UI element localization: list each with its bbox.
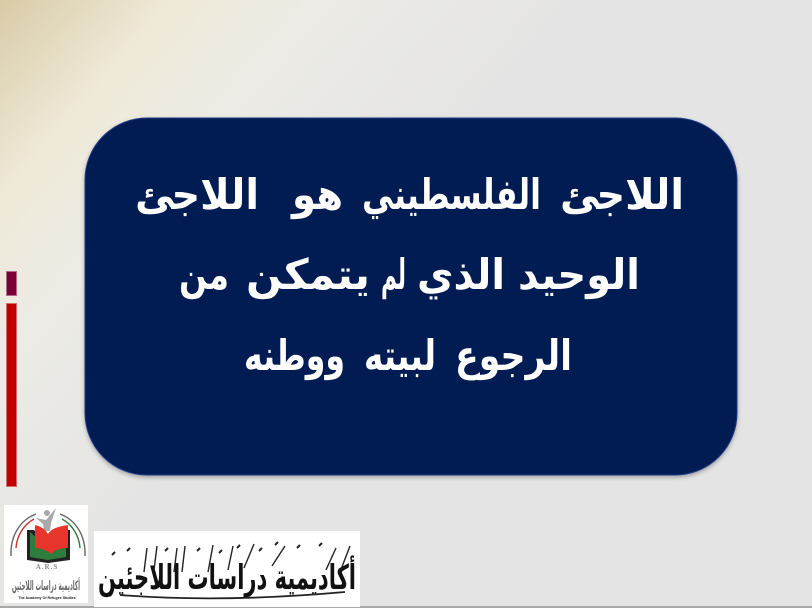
calligraphy strokes xyxy=(112,542,350,598)
accent bar: long red xyxy=(6,304,16,486)
text: line 3 xyxy=(244,331,572,381)
text: A.R.S: A.R.S xyxy=(36,563,58,571)
text: line 3: الرجوع xyxy=(455,331,572,381)
text: line 2: لم xyxy=(381,250,406,299)
text: english name: The Academy Of Refugee Studies xyxy=(18,596,76,600)
logo: academy emblem xyxy=(4,505,88,603)
icon: open book xyxy=(27,525,70,563)
text: أكاديمية دراسات اللاجئين xyxy=(12,577,80,594)
text: line 2: الوحيد xyxy=(518,250,640,300)
text: line 3: لبيته xyxy=(364,331,436,380)
logo: calligraphy banner xyxy=(94,531,360,607)
text: line 2: الذي xyxy=(417,250,505,299)
text: line 1 xyxy=(135,170,684,220)
text: academy name: أكاديمية دراسات اللاجئين xyxy=(98,555,356,598)
text: line 1: الفلسطيني xyxy=(362,170,541,220)
icon: figure xyxy=(36,508,56,531)
panel: main message xyxy=(85,118,737,475)
text: line 1: اللاجئ xyxy=(560,170,684,219)
text: line 1: هو xyxy=(290,170,343,220)
text: line 3: ووطنه xyxy=(244,331,345,381)
text: line 2: من xyxy=(179,250,229,300)
text: line 2: يتمكن xyxy=(246,250,370,300)
text: line 1: اللاجئ xyxy=(135,170,259,219)
icon: arcs xyxy=(11,514,85,556)
text: line 2 xyxy=(179,250,640,300)
accent bar: short maroon xyxy=(6,272,16,296)
